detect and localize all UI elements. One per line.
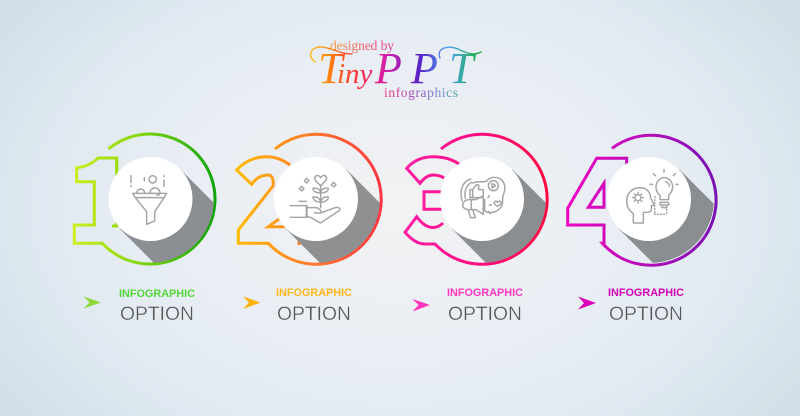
panel: option 3: [403, 132, 549, 266]
label: INFOGRAPHIC: [276, 287, 352, 299]
numeral 2 and ring: [237, 134, 381, 264]
arrow: [84, 296, 101, 308]
logo: Tiny PPT: T: [449, 44, 477, 93]
logo: infographics: infographics: [384, 85, 458, 100]
logo: Tiny PPT: P: [410, 44, 438, 93]
caption: option 4: [578, 287, 684, 325]
white circle: [274, 157, 358, 241]
arrow: [412, 299, 430, 312]
white circle: [108, 157, 192, 241]
panel: option 2: [234, 132, 383, 266]
long shadow: [452, 169, 546, 263]
icon: hand with plant: [290, 176, 340, 223]
logo: Tiny PPT: P: [374, 44, 402, 93]
logo: Tiny PPT: iny: [337, 58, 373, 90]
numeral 1 and ring: [74, 134, 215, 264]
long shadow: [286, 169, 380, 263]
caption: option 3: [412, 287, 523, 325]
logo: designed by: designed by: [330, 38, 394, 53]
logo: Tiny PPT: T: [318, 44, 346, 93]
caption: option 1: [84, 288, 195, 325]
white circle: [607, 157, 691, 241]
label: INFOGRAPHIC: [608, 287, 684, 299]
option text: OPTION: [448, 303, 522, 325]
option text: OPTION: [277, 303, 351, 325]
logo: [311, 38, 481, 100]
label: INFOGRAPHIC: [119, 288, 195, 300]
icon: megaphone and social: [461, 177, 505, 218]
panel: option 4: [566, 134, 718, 267]
option text: OPTION: [120, 303, 194, 325]
option text: OPTION: [609, 303, 683, 325]
numeral 4 and ring: [568, 135, 716, 265]
icon: funnel: [131, 176, 167, 224]
arrow: [243, 296, 260, 309]
icon: head and lightbulb: [627, 170, 678, 223]
arrow: [578, 296, 596, 310]
caption: option 2: [243, 287, 352, 325]
long shadow: [619, 169, 714, 263]
long shadow: [120, 169, 214, 263]
numeral 3 and ring: [405, 134, 547, 264]
label: INFOGRAPHIC: [447, 287, 523, 299]
panel: option 1: [72, 132, 216, 266]
logo swashes: [311, 47, 481, 62]
white circle: [440, 157, 524, 241]
